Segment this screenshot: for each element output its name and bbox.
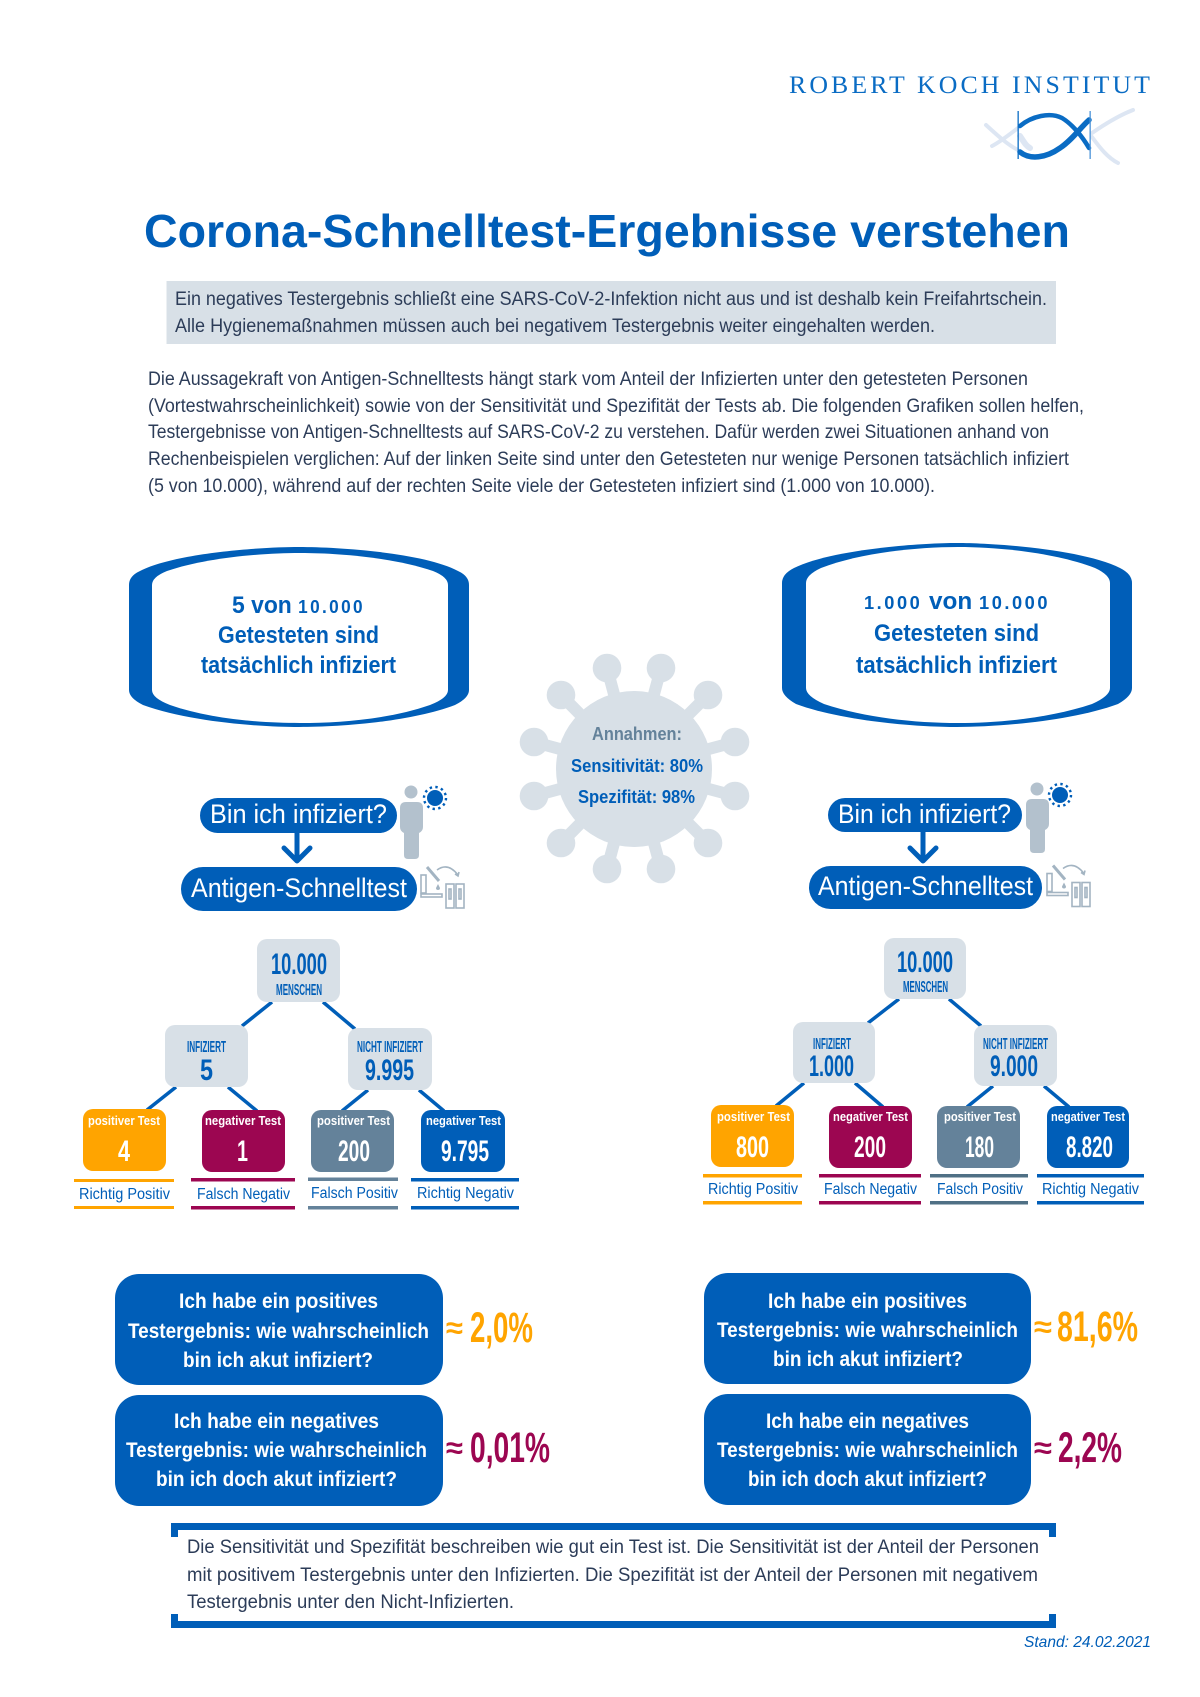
arrow: down right <box>910 832 936 861</box>
node: 10.000 Menschen right: MENSCHEN <box>903 979 948 996</box>
question: right positive result: bin ich akut infiziert? <box>773 1347 963 1371</box>
result: richtig negativ 8.820: negativer Test <box>1051 1110 1126 1124</box>
question: right positive result: ≈ <box>1034 1311 1052 1344</box>
result: falsch negativ 200: negativer Test <box>833 1110 909 1124</box>
question: right negative result: Ich habe ein negatives <box>766 1409 969 1433</box>
panel: left scenario heading: 5 von 10.000 <box>232 592 365 619</box>
panel: left scenario heading: tatsächlich infiziert <box>201 652 396 679</box>
virus: assumptions: Annahmen: <box>592 724 682 744</box>
panel: left test flow <box>181 786 464 911</box>
icon: person with virus right <box>1026 782 1071 853</box>
result: richtig positiv 800 <box>703 1105 802 1204</box>
result: richtig negativ 8.820: Richtig Negativ <box>1042 1181 1139 1198</box>
node: infiziert 1.000 <box>793 1022 875 1083</box>
question: right negative result <box>704 1394 1122 1505</box>
result: falsch positiv 180 <box>930 1106 1028 1204</box>
node: nicht infiziert 9.000: 9.000 <box>990 1050 1038 1083</box>
callout: negative test warning <box>166 281 1056 344</box>
panel: right scenario heading <box>782 543 1132 727</box>
node: 10.000 Menschen right <box>884 938 966 999</box>
node: infiziert 5 <box>165 1025 248 1087</box>
question: left positive result: bin ich akut infiziert? <box>183 1348 373 1372</box>
pill: Antigen-Schnelltest left <box>181 867 417 911</box>
node: 10.000 Menschen <box>257 939 340 1002</box>
question: left positive result: Testergebnis: wie wahrscheinlich <box>128 1319 429 1343</box>
node: 10.000 Menschen: 10.000 <box>271 948 327 981</box>
panel: left scenario heading: Getesteten sind <box>218 622 379 649</box>
icon: test kit left <box>421 867 464 908</box>
callout: negative test warning: Ein negatives Testergebnis schließt eine SARS-CoV-2-Infektion nicht aus und ist deshalb kein Freifahrtschein. <box>175 289 1047 310</box>
icon: person with virus left <box>400 786 446 859</box>
result: falsch positiv 200: positiver Test <box>317 1114 391 1128</box>
virus: assumptions: Spezifität: 98% <box>578 787 695 807</box>
question: left positive result: ≈ <box>446 1312 463 1345</box>
question: right positive result <box>704 1273 1138 1384</box>
intro paragraph: (5 von 10.000), während auf der rechten Seite viele der Getesteten infiziert sind (1.000 von 10.000). <box>148 476 935 497</box>
result: falsch negativ 200: Falsch Negativ <box>824 1181 917 1198</box>
intro paragraph <box>148 369 1084 497</box>
intro paragraph: Rechenbeispielen verglichen: Auf der linken Seite sind unter den Getesteten nur wenige Personen tatsächlich infiziert <box>148 449 1070 470</box>
panel: right scenario heading: 1.000 von 10.000 <box>864 588 1050 615</box>
question: left negative result: 0,01% <box>470 1424 550 1472</box>
result: falsch negativ 1: Falsch Negativ <box>197 1186 290 1203</box>
result: richtig negativ 9.795: 9.795 <box>441 1135 489 1168</box>
date stamp: Stand: 24.02.2021 <box>1024 1634 1151 1651</box>
title: Corona-Schnelltest-Ergebnisse verstehen <box>144 205 1070 257</box>
result: richtig positiv 4: Richtig Positiv <box>79 1186 170 1203</box>
result: falsch negativ 1: 1 <box>237 1135 248 1168</box>
node: nicht infiziert 9.995 <box>348 1028 432 1090</box>
text block: sensitivity and specificity definition <box>171 1523 1056 1628</box>
question: right negative result: bin ich doch akut infiziert? <box>748 1467 987 1491</box>
question: left negative result: Testergebnis: wie wahrscheinlich <box>126 1438 427 1462</box>
result: falsch positiv 200: Falsch Positiv <box>311 1185 398 1202</box>
question: right positive result: Ich habe ein positives <box>768 1289 967 1313</box>
virus: assumptions <box>520 654 749 883</box>
result: richtig negativ 9.795: negativer Test <box>426 1114 502 1128</box>
logo: Robert Koch Institut <box>789 72 1153 163</box>
result: falsch positiv 180: positiver Test <box>944 1110 1017 1124</box>
question: left negative result: ≈ <box>446 1432 463 1465</box>
result: falsch negativ 200 <box>819 1106 921 1204</box>
question: left positive result: Ich habe ein positives <box>179 1289 378 1313</box>
node: infiziert 1.000: 1.000 <box>809 1050 854 1083</box>
result: falsch positiv 180: 180 <box>965 1131 994 1164</box>
result: falsch positiv 200: 200 <box>338 1135 370 1168</box>
question: right positive result: Testergebnis: wie wahrscheinlich <box>717 1318 1018 1342</box>
question: right positive result: 81,6% <box>1057 1303 1138 1351</box>
result: richtig negativ 9.795 <box>411 1110 519 1210</box>
question: left negative result <box>115 1395 550 1506</box>
node: nicht infiziert 9.995: 9.995 <box>365 1054 414 1087</box>
result: richtig positiv 4: 4 <box>118 1135 130 1168</box>
text block: sensitivity and specificity definition: Die Sensitivität und Spezifität beschreiben wie gut ein Test ist. Die Sensitivität ist der Anteil der Personen <box>187 1537 1039 1558</box>
pill: Antigen-Schnelltest right: Antigen-Schnelltest <box>818 871 1033 901</box>
result: richtig negativ 8.820 <box>1037 1106 1144 1204</box>
result: falsch positiv 180: Falsch Positiv <box>937 1181 1023 1198</box>
panel: right test flow <box>809 782 1090 909</box>
pill: Antigen-Schnelltest right <box>809 866 1042 909</box>
pill: Bin ich infiziert right: Bin ich infiziert? <box>838 799 1011 829</box>
chart: right probability tree <box>703 938 1144 1204</box>
question: left negative result: bin ich doch akut infiziert? <box>156 1467 397 1491</box>
logo: Robert Koch Institut: ROBERT KOCH INSTITUT <box>789 72 1153 99</box>
result: falsch negativ 200: 200 <box>854 1131 886 1164</box>
panel: right scenario heading: Getesteten sind <box>874 620 1039 647</box>
result: richtig positiv 4: positiver Test <box>88 1114 161 1128</box>
node: nicht infiziert 9.995: NICHT INFIZIERT <box>357 1039 423 1056</box>
pill: Bin ich infiziert left: Bin ich infiziert? <box>210 799 387 829</box>
node: 10.000 Menschen right: 10.000 <box>897 946 953 979</box>
node: infiziert 1.000: INFIZIERT <box>813 1036 851 1053</box>
intro paragraph: (Vortestwahrscheinlichkeit) sowie von der Sensitivität und Spezifität der Tests ab. Die folgenden Grafiken sollen helfen, <box>148 396 1084 417</box>
question: left negative result: Ich habe ein negatives <box>174 1409 379 1433</box>
result: richtig positiv 4 <box>74 1109 174 1209</box>
node: infiziert 5: INFIZIERT <box>187 1039 226 1056</box>
virus: assumptions: Sensitivität: 80% <box>571 756 703 776</box>
chart: left probability tree <box>74 939 519 1210</box>
result: richtig positiv 800: Richtig Positiv <box>708 1181 798 1198</box>
text block: sensitivity and specificity definition: mit positivem Testergebnis unter den Infizierten. Die Spezifität ist der Anteil der Personen mit negativem <box>187 1565 1038 1586</box>
arrow: down left <box>284 833 310 861</box>
pill: Antigen-Schnelltest left: Antigen-Schnelltest <box>191 873 407 903</box>
result: richtig negativ 8.820: 8.820 <box>1066 1131 1113 1164</box>
panel: left scenario heading <box>129 547 469 727</box>
question: right negative result: Testergebnis: wie wahrscheinlich <box>717 1438 1018 1462</box>
panel: right scenario heading: tatsächlich infiziert <box>856 652 1057 679</box>
result: richtig positiv 800: 800 <box>736 1131 769 1164</box>
node: infiziert 5: 5 <box>200 1054 213 1087</box>
icon: test kit right <box>1047 865 1090 906</box>
result: richtig negativ 9.795: Richtig Negativ <box>417 1185 514 1202</box>
node: nicht infiziert 9.000: NICHT INFIZIERT <box>983 1036 1048 1053</box>
result: falsch positiv 200 <box>308 1110 398 1210</box>
node: 10.000 Menschen: MENSCHEN <box>276 982 322 999</box>
question: right negative result: ≈ <box>1034 1432 1052 1465</box>
node: nicht infiziert 9.000 <box>974 1025 1057 1086</box>
callout: negative test warning: Alle Hygienemaßnahmen müssen auch bei negativem Testergebnis weiter eingehalten werden. <box>175 316 935 337</box>
question: right negative result: 2,2% <box>1058 1424 1122 1472</box>
result: richtig positiv 800: positiver Test <box>717 1110 791 1124</box>
result: falsch negativ 1 <box>191 1110 295 1210</box>
question: left positive result <box>115 1274 533 1385</box>
intro paragraph: Testergebnisse von Antigen-Schnelltests auf SARS-CoV-2 zu verstehen. Dafür werden zwei Situationen anhand von <box>148 422 1049 443</box>
result: falsch negativ 1: negativer Test <box>205 1114 282 1128</box>
text block: sensitivity and specificity definition: Testergebnis unter den Nicht-Infizierten. <box>187 1592 514 1613</box>
intro paragraph: Die Aussagekraft von Antigen-Schnelltests hängt stark vom Anteil der Infizierten unter den getesteten Personen <box>148 369 1028 390</box>
question: left positive result: 2,0% <box>470 1304 533 1352</box>
